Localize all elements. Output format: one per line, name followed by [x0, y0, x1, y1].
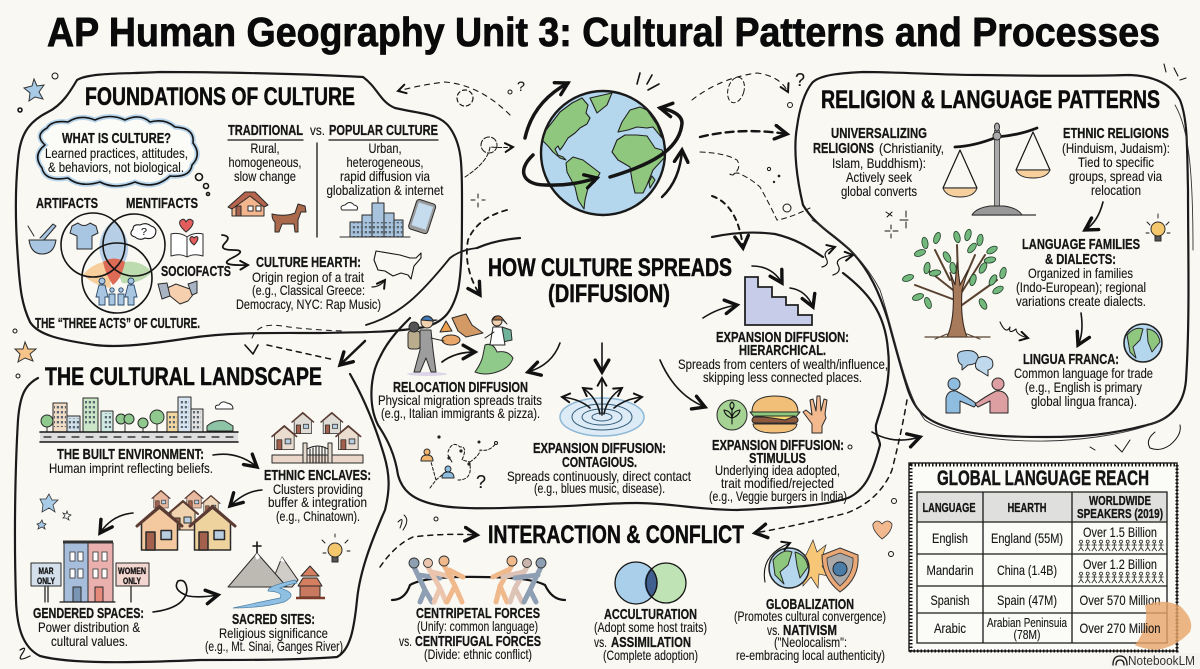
cloud: what is culture: Learned practices, attitudes,: [45, 145, 188, 161]
arrow: dashed right: [755, 400, 907, 533]
traditional vs popular culture: Rural,: [250, 140, 280, 156]
hierarchical text: HIERARCHICAL.: [739, 342, 826, 359]
panel outline: [16, 72, 462, 346]
heading: THE CULTURAL LANDSCAPE: [45, 363, 322, 391]
icon: acculturation venn: [615, 562, 686, 604]
universalizing religions text: (Christianity,: [879, 140, 944, 156]
contagious text: (e.g., blues music, disease).: [534, 480, 665, 496]
arrow: ethnic to language families: [1085, 202, 1103, 230]
panel: how culture spreads: [366, 233, 889, 510]
icon: thought bubble: [131, 224, 156, 239]
ethnic enclaves text: [264, 467, 371, 524]
contagious text: CONTAGIOUS.: [562, 454, 637, 471]
globalization text: (Promotes cultural convergence): [734, 608, 886, 624]
gendered spaces text: cultural values.: [51, 633, 128, 649]
traditional vs popular culture: TRADITIONAL: [228, 122, 303, 139]
row: Spanish: Spain (47M): [997, 592, 1057, 608]
icon: neighborhood houses: [137, 491, 235, 550]
venn: three acts of culture: ?: [141, 227, 147, 238]
header row: WORLDWIDE: [1089, 494, 1151, 508]
icons: stars: [37, 494, 71, 529]
centripetal forces text: (Unify: common language): [417, 618, 538, 634]
acculturation text: (Complete adoption): [603, 647, 698, 663]
lingua franca text: [1014, 351, 1153, 409]
culture hearth text: Democracy, NYC: Rap Music): [236, 296, 381, 312]
row: English: [932, 524, 1164, 551]
row: Mandarin: Over 1.2 Billion: [1083, 556, 1157, 572]
relocation diffusion text: (e.g., Italian immigrants & pizza).: [381, 405, 540, 421]
built environment text: THE BUILT ENVIRONMENT:: [57, 446, 204, 463]
ethnic enclaves text: ETHNIC ENCLAVES:: [264, 467, 371, 484]
icon: central globe: [524, 73, 682, 215]
panel outline: [15, 374, 389, 662]
traditional vs popular culture: globalization & internet: [326, 182, 444, 198]
stimulus text: STIMULUS: [749, 450, 806, 467]
globalization text: [734, 596, 886, 663]
icon: lightbulb: [1146, 214, 1170, 241]
icon: two people talking: [946, 351, 1008, 413]
relocation diffusion text: Physical migration spreads traits: [378, 392, 542, 408]
row: Spanish: Spanish: [930, 592, 970, 608]
arrow: right side to table: [872, 432, 920, 440]
contagious text: Spreads continuously, direct contact: [507, 468, 691, 484]
universalizing religions text: UNIVERSALIZING: [831, 125, 927, 142]
contagious text: EXPANSION DIFFUSION:: [533, 440, 666, 457]
gendered spaces text: [33, 605, 144, 649]
built environment text: Human imprint reflecting beliefs.: [49, 460, 213, 476]
cloud: what is culture: WHAT IS CULTURE?: [62, 130, 171, 147]
globalization text: re-embracing local authenticity): [736, 647, 885, 663]
icon: ripple with arrows: [560, 378, 644, 436]
icon: tug of war: [392, 556, 565, 602]
relocation diffusion text: [378, 379, 542, 421]
table header fill: [917, 492, 1167, 522]
heading: (DIFFUSION): [548, 280, 670, 308]
row: Spanish: Over 570 Million: [1080, 592, 1160, 608]
header row: [922, 494, 1163, 521]
heading: INTERACTION & CONFLICT: [488, 521, 744, 549]
row: Arabic: Over 270 Million: [1080, 620, 1160, 636]
row: Arabic: Arabian Peninsuia: [987, 616, 1067, 630]
venn: three acts of culture: MENTIFACTS: [126, 195, 198, 212]
icon: leaf badge: [717, 400, 747, 430]
traditional vs popular culture: homogeneous,: [228, 154, 302, 170]
icon: barn: [228, 192, 268, 216]
acculturation text: ASSIMILATION: [611, 634, 691, 651]
dashed connectors around globe: ?: [795, 70, 805, 90]
globalization text: NATIVISM: [783, 622, 837, 639]
centripetal forces text: [399, 605, 541, 662]
traditional vs popular culture: POPULAR CULTURE: [329, 122, 438, 139]
cloud: what is culture: [38, 116, 210, 196]
panel outline: [371, 233, 889, 510]
table frame: [909, 463, 1177, 651]
icon: contact network: ?: [476, 472, 486, 492]
icon: sparkles: [885, 211, 908, 238]
built environment text: [49, 446, 213, 476]
language families text: (Indo-European); regional: [1016, 279, 1146, 295]
icon: lightbulb: [322, 534, 350, 562]
traditional vs popular culture: rapid diffusion via: [340, 168, 430, 184]
acculturation text: ACCULTURATION: [604, 606, 697, 623]
arrow: squiggle: [1000, 322, 1028, 338]
relocation diffusion text: RELOCATION DIFFUSION: [393, 379, 528, 396]
panel: religion and language patterns: [795, 64, 1193, 441]
ethnic religions text: groups, spread via: [1069, 168, 1162, 184]
traditional vs popular culture: vs.: [310, 122, 325, 138]
icon: small cloud: [341, 202, 358, 210]
icon: hand: [803, 396, 827, 433]
hierarchical text: Spreads from centers of wealth/influence,: [678, 356, 888, 372]
icon: gated houses: [272, 413, 363, 463]
icon: small globe: [1124, 324, 1162, 362]
icon: language tree: [902, 229, 1007, 339]
arrow: houses to gendered: [100, 513, 133, 533]
hierarchical text: EXPANSION DIFFUSION:: [716, 329, 849, 346]
outline second stroke: [812, 105, 1193, 441]
panel: cultural landscape: [15, 363, 389, 662]
acculturation text: (Adopt some host traits): [594, 619, 707, 635]
language families text: & DIALECTS:: [1045, 251, 1116, 268]
arrow: to contagious: [601, 343, 603, 372]
arrow: enclaves to houses: [230, 490, 262, 506]
culture hearth text: CULTURE HEARTH:: [256, 254, 361, 271]
universalizing religions text: RELIGIONS: [813, 140, 874, 157]
icon: horse: [272, 204, 306, 232]
arrow: to map: [372, 280, 385, 287]
ethnic religions text: Tied to specific: [1078, 154, 1154, 170]
header row: LANGUAGE: [922, 501, 976, 515]
lingua franca text: LINGUA FRANCA:: [1023, 351, 1119, 368]
row: Arabic: [934, 616, 1160, 642]
universalizing religions text: [813, 125, 944, 199]
stimulus text: trait modified/rejected: [721, 475, 834, 491]
centripetal forces text: CENTRIPETAL FORCES: [416, 605, 540, 622]
language families text: LANGUAGE FAMILIES: [1022, 236, 1140, 253]
arrow: families to lingua franca: [1078, 313, 1082, 345]
decorations: hearts and small circles: [398, 445, 896, 556]
centripetal forces text: (Divide: ethnic conflict): [424, 646, 532, 662]
lingua franca text: Common language for trade: [1014, 365, 1153, 381]
ethnic religions text: (Hinduism, Judaism):: [1062, 140, 1170, 156]
orbit arrows: [524, 73, 682, 197]
globalization text: GLOBALIZATION: [766, 596, 854, 613]
panel: interaction and conflict: [380, 400, 907, 663]
table grid: [917, 492, 1167, 643]
icon: city skyline: [340, 197, 410, 237]
icon: hiker and italy map: [475, 316, 513, 374]
row: Arabic: (78M): [1014, 628, 1040, 642]
row: Mandarin: Mandarin: [926, 562, 974, 578]
stimulus text: Underlying idea adopted,: [715, 462, 840, 478]
arrow: to stimulus: [660, 360, 705, 407]
traditional vs popular culture: [228, 122, 444, 237]
globalization text: ("Neolocalism":: [774, 634, 847, 650]
gendered spaces text: Power distribution &: [38, 619, 141, 635]
icon: globalization vs nativism: [764, 540, 858, 592]
arrow: squiggle to hearth: [222, 235, 248, 265]
arrow: foundations to landscape dashed: [245, 325, 365, 365]
icon: mortar and pestle: [28, 224, 56, 254]
venn: three acts of culture: SOCIOFACTS: [161, 263, 231, 280]
icon: t-shirt: [70, 223, 98, 249]
row: English: England (55M): [991, 530, 1063, 546]
arrow: to stairs: [703, 305, 737, 318]
row: Spanish: [930, 592, 1160, 608]
icon: USA map: [374, 251, 421, 279]
icon: contact network: [421, 435, 498, 492]
icon: book and heart: [171, 233, 203, 257]
venn: three acts of culture: ARTIFACTS: [36, 195, 98, 212]
icon: gendered building and signs: ONLY: [123, 576, 141, 586]
icon: sacred sites: [228, 534, 350, 608]
traditional vs popular culture: heterogeneous,: [346, 154, 424, 170]
acculturation text: [594, 606, 707, 663]
stimulus text: EXPANSION DIFFUSION:: [712, 437, 844, 454]
icon: gendered building and signs: MAR: [38, 566, 54, 576]
culture hearth text: Origin region of a trait: [252, 269, 364, 285]
panel: global language reach table: [909, 463, 1191, 651]
contagious text: [507, 440, 691, 496]
culture hearth text: [222, 235, 421, 312]
sacred sites text: [205, 611, 343, 654]
icon: balance scale: [943, 123, 1050, 215]
row: Arabic: Arabic: [934, 620, 966, 636]
traditional vs popular culture: Urban,: [368, 140, 402, 156]
arrow: traveler to map: [442, 352, 475, 362]
ethnic enclaves text: Clusters providing: [273, 481, 363, 497]
language families text: variations create dialects.: [1016, 293, 1146, 309]
icon: gendered building and signs: WOMEN: [118, 566, 146, 576]
panel: foundations of culture: [16, 72, 462, 346]
row: Mandarin: [926, 556, 1164, 583]
language families text: Organized in families: [1028, 265, 1133, 281]
heading: FOUNDATIONS OF CULTURE: [85, 83, 355, 111]
icon: gendered building and signs: ONLY: [37, 576, 55, 586]
lingua franca text: global lingua franca).: [1031, 393, 1137, 409]
centripetal forces text: CENTRIFUGAL FORCES: [415, 633, 541, 650]
header row: HEARTH: [1008, 501, 1046, 515]
row: English: Over 1.5 Billion: [1083, 524, 1157, 540]
traditional vs popular culture: slow change: [234, 168, 296, 184]
dashed connectors around globe: ?: [517, 78, 525, 94]
language families text: [1016, 236, 1146, 309]
sacred sites text: SACRED SITES:: [232, 611, 315, 628]
icon: smartphone: [408, 199, 436, 234]
heading: HOW CULTURE SPREADS: [488, 254, 732, 282]
globalization text: vs.: [767, 622, 780, 638]
acculturation text: vs.: [594, 634, 607, 650]
icon: veggie burger: [750, 396, 800, 433]
culture hearth text: (e.g., Classical Greece:: [252, 282, 365, 298]
decorations: left stars and circles: [13, 73, 58, 659]
arrow: loop to sacred sites: [153, 580, 218, 612]
row: English: English: [932, 530, 968, 546]
arrow: to relocation: [528, 343, 560, 372]
heading: [488, 254, 732, 308]
hierarchical text: skipping less connected places.: [703, 369, 862, 385]
decoration: rays and scribbles: [1164, 64, 1186, 80]
icon: built environment skyline: [40, 397, 238, 442]
notebooklm badge: NotebookLM: [1128, 653, 1195, 668]
ethnic enclaves text: (e.g., Chinatown).: [276, 508, 360, 524]
icon: traveler with pizza: [407, 314, 483, 376]
lingua franca text: (e.g., English is primary: [1025, 379, 1142, 395]
cloud: what is culture: & behaviors, not biological.: [48, 159, 184, 175]
universalizing religions text: Islam, Buddhism):: [832, 155, 926, 171]
venn: three acts of culture: [28, 195, 231, 332]
stimulus text: (e.g., Veggie burgers in India): [709, 488, 847, 504]
row: Mandarin: China (1.4B): [997, 562, 1057, 578]
icon: hierarchical stairs: [745, 266, 813, 325]
ethnic religions text: [1062, 125, 1170, 198]
label: three acts: THE “THREE ACTS” OF CULTURE.: [35, 315, 200, 332]
decoration: scribbles above table: [1090, 425, 1180, 452]
panel outline: [795, 72, 1188, 437]
hierarchical text: [678, 329, 888, 385]
universalizing religions text: global converts: [841, 183, 917, 199]
sacred sites text: (e.g., Mt. Sinai, Ganges River): [205, 638, 343, 654]
sacred sites text: Religious significance: [219, 625, 328, 641]
icon: handshake: [165, 284, 196, 304]
stimulus text: [709, 437, 847, 504]
orange smudge: [1135, 602, 1191, 650]
centripetal forces text: vs.: [399, 633, 412, 649]
universalizing religions text: Actively seek: [846, 169, 913, 185]
icon: gendered building and signs: [31, 542, 149, 602]
gendered spaces text: GENDERED SPACES:: [33, 605, 144, 622]
arrow: built environment to enclaves: [213, 454, 257, 467]
arrows: squiggles to religion panel: [822, 247, 853, 275]
icon: family: [96, 278, 137, 305]
ethnic religions text: relocation: [1091, 182, 1141, 198]
dashed connectors around globe: [398, 70, 810, 295]
ethnic enclaves text: buffer & integration: [268, 494, 367, 510]
arrow: dashed left: [380, 534, 477, 567]
header row: SPEAKERS (2019): [1077, 507, 1163, 521]
